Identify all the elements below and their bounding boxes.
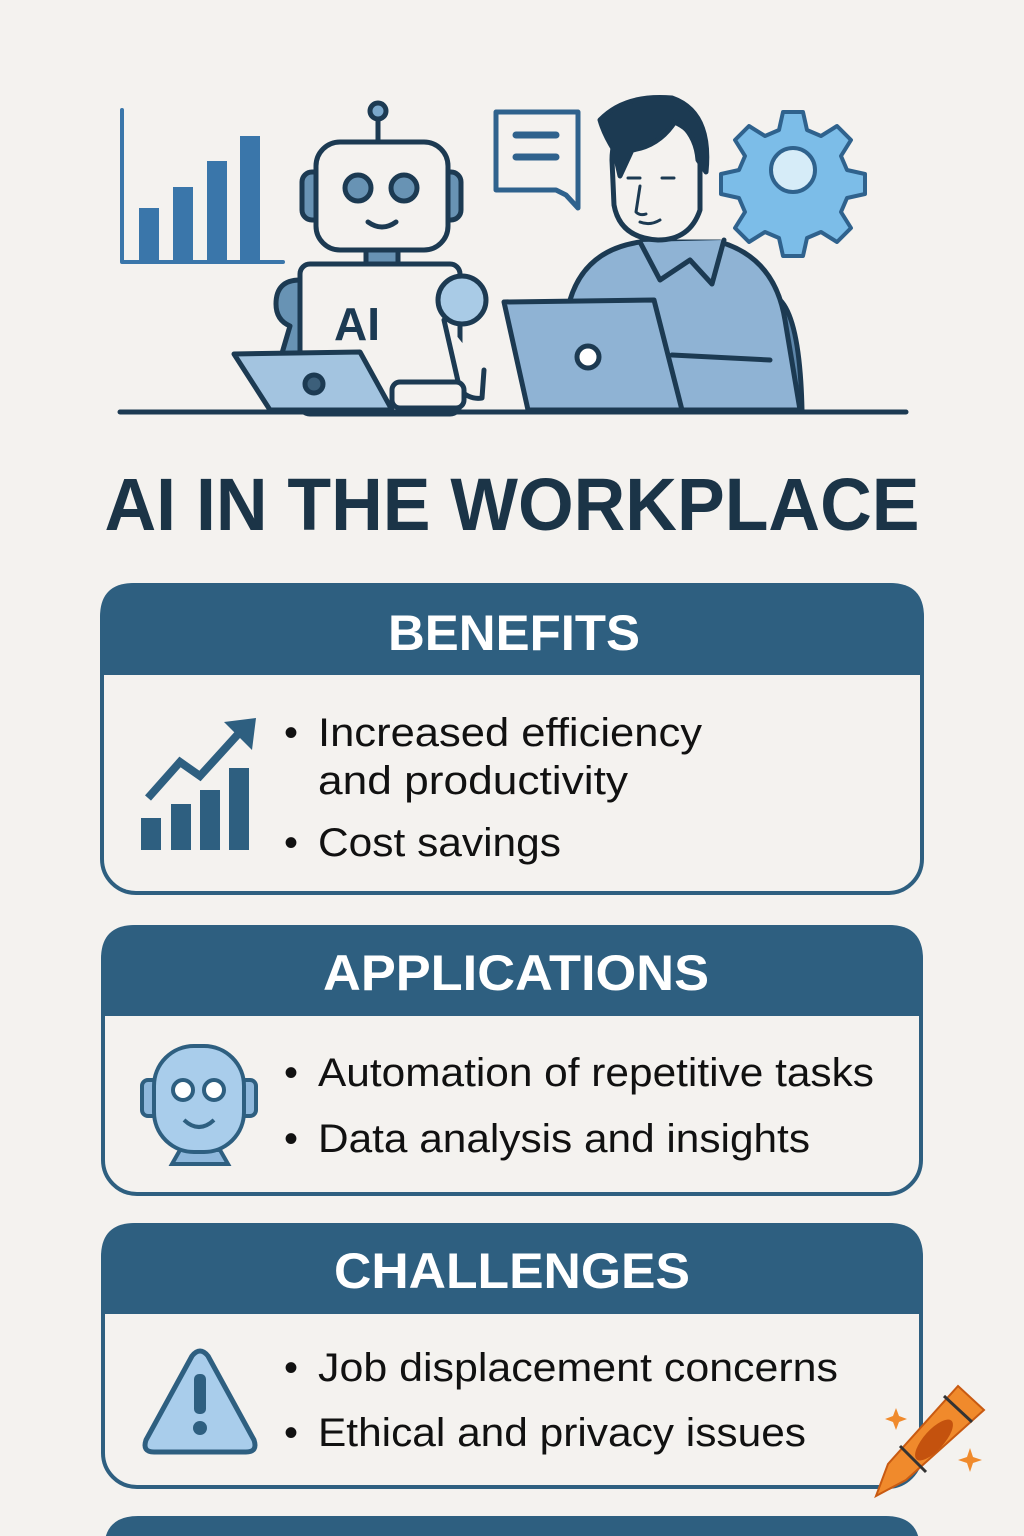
- panel: bottom (partial): [104, 1516, 920, 1536]
- icon: bar chart: [122, 110, 283, 262]
- icon: robot head: [142, 1046, 256, 1164]
- panel: challenges: [101, 1223, 923, 1487]
- icon: warning triangle: [145, 1351, 255, 1452]
- icon: robot: [276, 103, 486, 414]
- text: challenges bullets: [284, 1346, 838, 1455]
- icon: speech bubble: [496, 112, 578, 208]
- text: benefits bullets: •: [284, 821, 298, 865]
- icon: person: [560, 97, 802, 410]
- text: benefits bullets: and productivity: [318, 759, 628, 803]
- text: challenges bullets: Job displacement concerns: [318, 1346, 838, 1390]
- text: benefits bullets: Cost savings: [318, 821, 561, 865]
- panel: benefits: [100, 583, 924, 893]
- icon: crayon: [876, 1386, 984, 1496]
- desk line: [120, 410, 906, 414]
- panel: applications: [101, 925, 923, 1194]
- heading: applications: APPLICATIONS: [323, 945, 709, 1001]
- text: applications bullets: •: [284, 1117, 298, 1161]
- text: applications bullets: Data analysis and insights: [318, 1117, 810, 1161]
- text: challenges bullets: Ethical and privacy issues: [318, 1411, 806, 1455]
- icon: person laptop: [504, 300, 682, 410]
- text: challenges bullets: •: [284, 1411, 298, 1455]
- text: applications bullets: •: [284, 1051, 298, 1095]
- text: benefits bullets: Increased efficiency: [318, 711, 702, 755]
- heading: challenges: CHALLENGES: [334, 1243, 690, 1299]
- hero illustration: [120, 97, 906, 414]
- text: benefits bullets: [284, 711, 702, 865]
- text: challenges bullets: •: [284, 1346, 298, 1390]
- title: AI IN THE WORKPLACE: [104, 463, 920, 546]
- icon: gear: [721, 112, 865, 256]
- text: applications bullets: [284, 1051, 874, 1161]
- icon: growth chart: [141, 718, 256, 850]
- icon: robot laptop: [234, 352, 464, 410]
- heading: benefits: BENEFITS: [388, 605, 640, 661]
- text: applications bullets: Automation of repetitive tasks: [318, 1051, 874, 1095]
- text: benefits bullets: •: [284, 711, 298, 755]
- icon: robot: AI: [334, 298, 380, 350]
